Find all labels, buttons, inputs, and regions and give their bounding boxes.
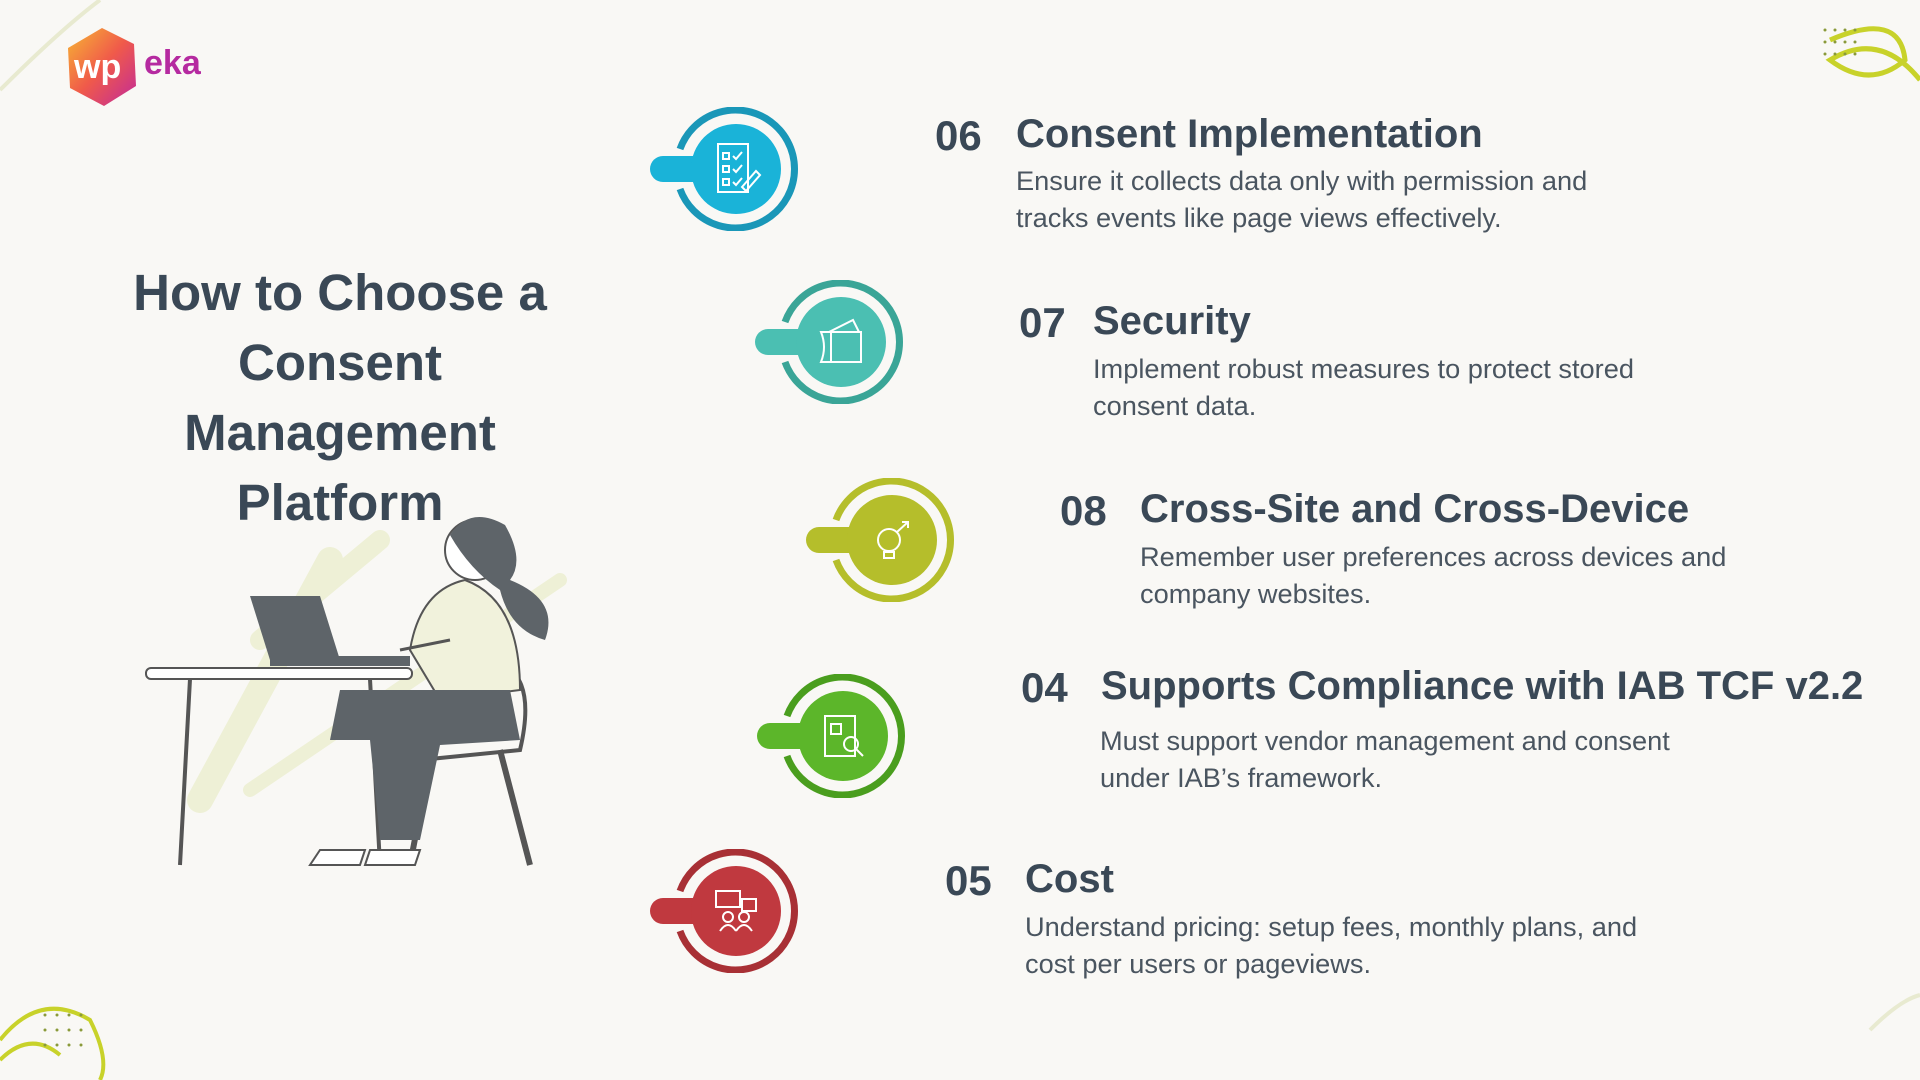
icon 05: people chat: [650, 849, 798, 973]
logo: wp: [73, 48, 121, 86]
item 06: tracks events like page views effectively.: [1016, 202, 1502, 233]
item 08: [1060, 487, 1726, 609]
icon 04: document search: [757, 674, 905, 798]
illustration: woman at laptop: [145, 517, 567, 866]
item 08: Cross-Site and Cross-Device: [1140, 487, 1689, 531]
item 07: consent data.: [1093, 390, 1256, 421]
logo: eka: [144, 44, 202, 82]
item 04: [1021, 664, 1863, 793]
item 05: 05: [945, 857, 992, 904]
item 06: [935, 112, 1587, 233]
item 06: Consent Implementation: [1016, 112, 1483, 156]
title: Management: [184, 404, 496, 461]
item 06: 06: [935, 112, 982, 159]
item 07: 07: [1019, 299, 1066, 346]
item 05: [945, 857, 1637, 979]
item 07: Security: [1093, 299, 1251, 343]
icon 08: idea: [806, 478, 954, 602]
item 04: Must support vendor management and consent: [1100, 725, 1670, 756]
item 05: Cost: [1025, 857, 1114, 901]
item 08: Remember user preferences across devices and: [1140, 541, 1726, 572]
item 08: 08: [1060, 487, 1107, 534]
title: Platform: [237, 474, 443, 531]
item 07: Implement robust measures to protect stored: [1093, 353, 1634, 384]
item 05: Understand pricing: setup fees, monthly plans, and: [1025, 911, 1637, 942]
icon 07: ticket: [755, 280, 903, 404]
item 05: cost per users or pageviews.: [1025, 948, 1371, 979]
logo: [68, 28, 202, 106]
item 07: [1019, 299, 1634, 421]
item 04: under IAB’s framework.: [1100, 762, 1382, 793]
icon 06: checklist: [650, 107, 798, 231]
item 08: company websites.: [1140, 578, 1371, 609]
item 06: Ensure it collects data only with permission and: [1016, 165, 1587, 196]
item 04: Supports Compliance with IAB TCF v2.2: [1101, 664, 1863, 708]
item 04: 04: [1021, 664, 1068, 711]
title: [133, 264, 548, 531]
title: How to Choose a: [133, 264, 547, 321]
title: Consent: [238, 334, 442, 391]
